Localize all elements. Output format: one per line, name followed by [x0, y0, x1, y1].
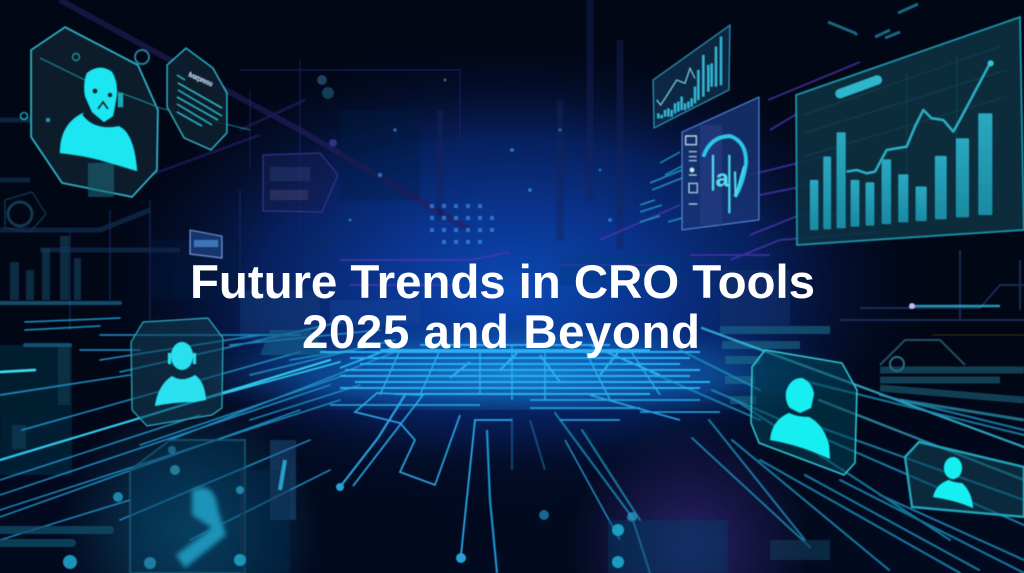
panel: user profile, top left — [20, 27, 250, 197]
icon: person — [60, 68, 137, 171]
background circuitry, upper left — [0, 0, 620, 330]
title — [190, 256, 815, 359]
panel: support person, mid left — [131, 318, 223, 426]
icon: person — [155, 342, 206, 406]
right-side background circuitry — [720, 250, 1024, 420]
panel: support person, right — [751, 350, 857, 475]
background bar columns, left — [10, 236, 81, 300]
top dashes — [828, 4, 918, 38]
panel: analytics gauge — [682, 97, 759, 230]
title: 2025 and Beyond — [302, 306, 700, 359]
centre dot grid — [348, 78, 612, 244]
perspective data lines, left — [0, 303, 400, 543]
panel: support person, far right — [905, 442, 1024, 517]
small device icon — [190, 230, 222, 258]
perspective data lines, right — [555, 328, 1024, 573]
small traces left of gauge panel — [640, 152, 682, 222]
icon: person — [933, 457, 973, 508]
trend line — [847, 63, 990, 173]
chart grid — [803, 47, 1007, 223]
title: Future Trends in CRO Tools — [190, 256, 815, 309]
chart pill heading — [840, 80, 877, 94]
bars — [810, 113, 992, 230]
purple traces, centre-right — [340, 62, 880, 285]
panel: document — [167, 48, 227, 150]
gauge label: a — [716, 166, 730, 193]
blue panel blocks behind title — [240, 255, 790, 340]
faded hexagon panel — [263, 75, 338, 212]
panel: main bar and line chart — [796, 17, 1024, 245]
document heading: Ivarpress — [187, 71, 214, 88]
icon: person — [770, 378, 830, 459]
central circuit field — [320, 345, 720, 573]
blurred panels, bottom right — [608, 520, 830, 573]
left teal panel mid-ground — [0, 345, 72, 475]
blurred panels, bottom left — [63, 440, 296, 573]
panel: mini chart — [653, 25, 730, 128]
